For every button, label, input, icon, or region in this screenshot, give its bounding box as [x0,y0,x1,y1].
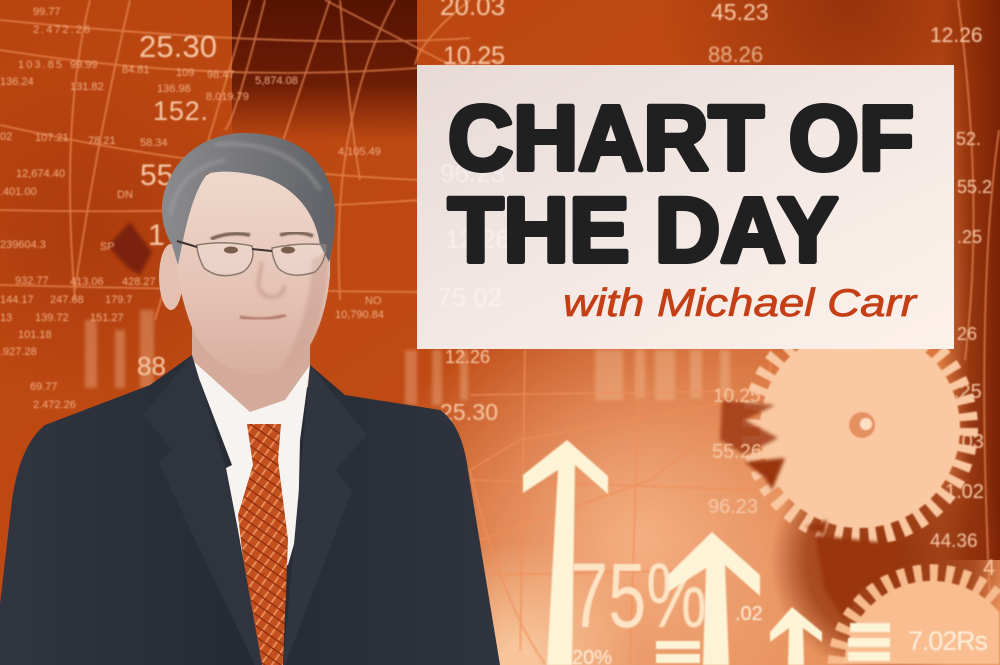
small numbers upper left: 84.81 [122,64,150,76]
large numbers: 12.26 [445,347,490,367]
large numbers: 26 [957,324,977,344]
small numbers upper left: 58.34 [140,137,168,149]
right lapel [283,365,367,665]
small numbers upper left: NO [365,295,382,307]
gear: lower left faint [488,650,538,665]
large numbers: .02 [735,603,763,625]
small numbers upper left: 2.472.26 [33,24,90,36]
large numbers: 10.25 [713,386,761,407]
small numbers upper left: 179.7 [105,294,133,306]
small numbers upper left: 103.85 [18,59,62,71]
large numbers: 88 [137,351,166,381]
small numbers upper left: 144.17 [0,294,34,306]
large numbers: 55.2 [957,177,992,197]
shirt collar [192,360,310,565]
arrow: up left [523,440,608,665]
large numbers: 1 [148,219,165,252]
eyes [224,246,295,254]
small numbers upper left: 10,790.84 [335,309,384,321]
large numbers: 5.03 [945,431,984,453]
small numbers upper left: SP [100,241,115,253]
nose [258,262,284,297]
small numbers upper left: .401.00 [0,186,37,198]
faint numbers in panel: 12.26 [445,224,510,254]
arrow: small up right [770,607,822,665]
small numbers upper left: 136.98 [157,83,191,95]
title panel [417,65,954,349]
left lapel [143,355,262,665]
large numbers: 4 [983,555,995,580]
small numbers upper left [0,6,384,411]
small numbers upper left: 99.99 [70,59,98,71]
large numbers: 12.26 [930,24,983,47]
large numbers: 55 [140,159,173,192]
label: 75 percent: 75% [570,545,707,647]
mouth [240,315,286,319]
large numbers: 25.30 [139,29,217,64]
small numbers upper left: 78.21 [88,135,116,147]
small numbers upper left: 13 [0,312,12,324]
large numbers: 25.30 [440,399,498,425]
faint numbers in panel [437,158,510,312]
gear: small lower right [836,573,999,664]
small numbers upper left: 131.82 [70,81,104,93]
small numbers upper left: 239604.3 [0,239,46,251]
large numbers: 1.02 [945,481,984,503]
large numbers: 152. [153,96,208,126]
hair [162,133,335,265]
small numbers upper left: 107.21 [35,132,69,144]
large numbers: 52. [956,129,981,149]
small numbers upper left: 247.68 [50,294,84,306]
necktie [238,424,288,665]
small numbers upper left: 98.47 [207,69,235,81]
small numbers upper left: 413.06 [70,276,104,288]
small numbers upper left: 151.27 [90,312,124,324]
large numbers: 88.26 [708,42,763,67]
small numbers upper left: 4,105.49 [338,146,381,158]
arrow: up centre [668,532,760,665]
small numbers upper left: 139.72 [35,312,69,324]
dark gear teeth left of large gear [720,400,905,620]
small numbers upper left: 101.18 [18,329,52,341]
ear [159,244,183,310]
small numbers upper left: 5,874.08 [255,75,298,87]
face shading right [280,250,330,370]
small numbers upper left: 8,019.79 [206,91,249,103]
eyebrows [211,233,313,239]
face [177,164,330,374]
large numbers: 10.25 [443,42,505,70]
neck [192,320,310,440]
heading: chart of the day [448,88,914,282]
large numbers: 7.02Rs [908,626,988,656]
small numbers upper left: .927.28 [0,346,37,358]
small numbers upper left: 69.77 [30,381,58,393]
small numbers upper left: 02 [0,131,12,143]
glasses [177,241,326,276]
large numbers: 96.23 [708,496,758,518]
small numbers upper left: 932.77 [15,275,49,287]
equals bars [656,623,890,663]
small numbers upper left: 428.27 [122,276,156,288]
faint numbers in panel: 75.02 [437,282,502,312]
small numbers upper left: DN [117,189,133,201]
jacket [0,355,500,665]
small numbers upper left: 2.472.26 [33,399,76,411]
gear: large [752,320,968,536]
large numbers: .25 [957,227,982,247]
heading: chart of the day: THE DAY [448,180,838,282]
small numbers upper left: 12,674.40 [16,168,65,180]
dark diamond left [108,222,152,275]
portrait: man in suit [0,133,500,665]
dark patch top centre [232,0,417,140]
small numbers upper left: 109 [176,67,194,79]
large numbers: 55.26 [712,441,762,463]
large numbers: .25 [954,381,982,403]
small numbers upper left: 136.24 [0,76,34,88]
vertical chart bars [85,310,730,405]
large numbers: 44.36 [930,531,978,552]
hair highlights [170,144,320,215]
small numbers upper left: 99.77 [33,6,61,18]
subtitle: with Michael Carr: with Michael Carr [563,282,918,325]
heading: chart of the day: CHART OF [448,88,914,190]
faint numbers in panel: 96.23 [440,158,505,188]
